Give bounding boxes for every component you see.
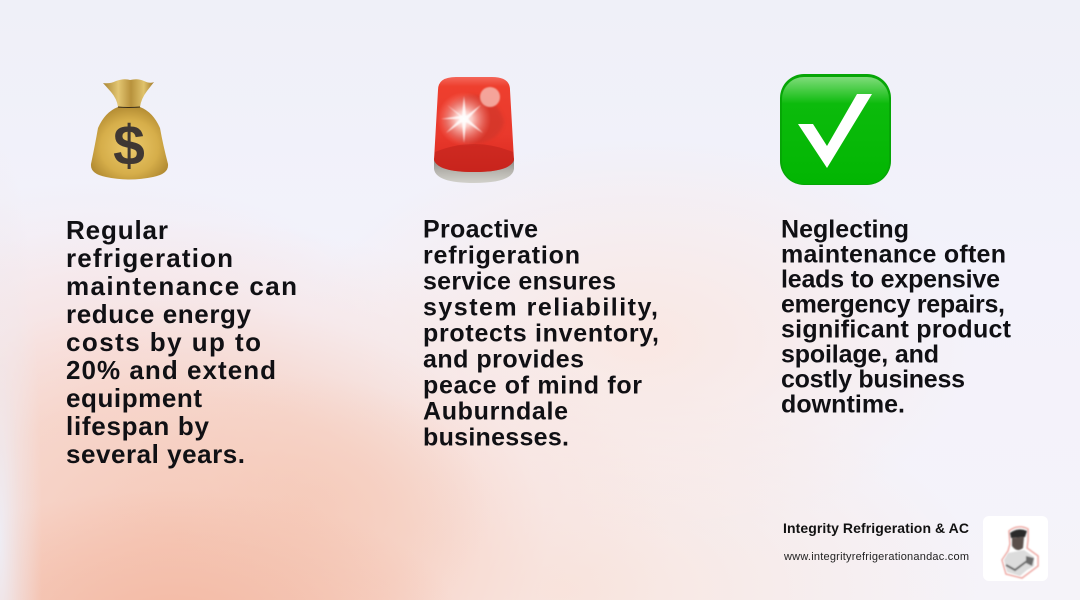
text: proactive service column xyxy=(423,216,659,452)
text: energy savings column: reduce energy xyxy=(66,299,252,329)
text: neglect consequences column: leads to expensive xyxy=(781,266,1000,294)
text: neglect consequences column: emergency repairs, xyxy=(781,290,1005,318)
icon: red siren xyxy=(434,77,514,183)
logo: technician portrait xyxy=(983,516,1048,581)
text: energy savings column: equipment xyxy=(66,383,202,413)
text: neglect consequences column: Neglecting xyxy=(781,216,909,244)
icon: money bag: $ xyxy=(113,114,145,178)
text: proactive service column: system reliability, xyxy=(423,294,658,322)
company name: Integrity Refrigeration & AC xyxy=(783,520,969,536)
text: energy savings column: maintenance can xyxy=(66,271,297,301)
text: energy savings column xyxy=(66,215,297,469)
text: proactive service column: refrigeration xyxy=(423,242,580,270)
text: proactive service column: businesses. xyxy=(423,424,569,452)
icon: green check mark xyxy=(780,74,891,185)
text: energy savings column: several years. xyxy=(66,439,245,469)
text: neglect consequences column: downtime. xyxy=(781,390,905,418)
text: proactive service column: peace of mind for xyxy=(423,372,642,400)
text: energy savings column: costs by up to xyxy=(66,327,261,357)
text: energy savings column: Regular xyxy=(66,215,168,245)
text: neglect consequences column: costly business xyxy=(781,366,965,394)
text: proactive service column: service ensures xyxy=(423,268,616,296)
text: energy savings column: 20% and extend xyxy=(66,355,276,385)
text: energy savings column: lifespan by xyxy=(66,411,210,441)
text: proactive service column: Proactive xyxy=(423,216,538,244)
text: proactive service column: and provides xyxy=(423,346,584,374)
text: energy savings column: refrigeration xyxy=(66,243,233,273)
website url: www.integrityrefrigerationandac.com xyxy=(783,551,969,563)
text: neglect consequences column: maintenance often xyxy=(781,240,1006,268)
text: neglect consequences column: significant product xyxy=(781,316,1012,344)
text: proactive service column: protects inventory, xyxy=(423,320,659,348)
brand block xyxy=(783,516,1048,581)
icon: money bag xyxy=(91,79,168,180)
text: neglect consequences column: spoilage, and xyxy=(781,340,939,368)
text: proactive service column: Auburndale xyxy=(423,398,568,426)
text: neglect consequences column xyxy=(781,216,1012,418)
